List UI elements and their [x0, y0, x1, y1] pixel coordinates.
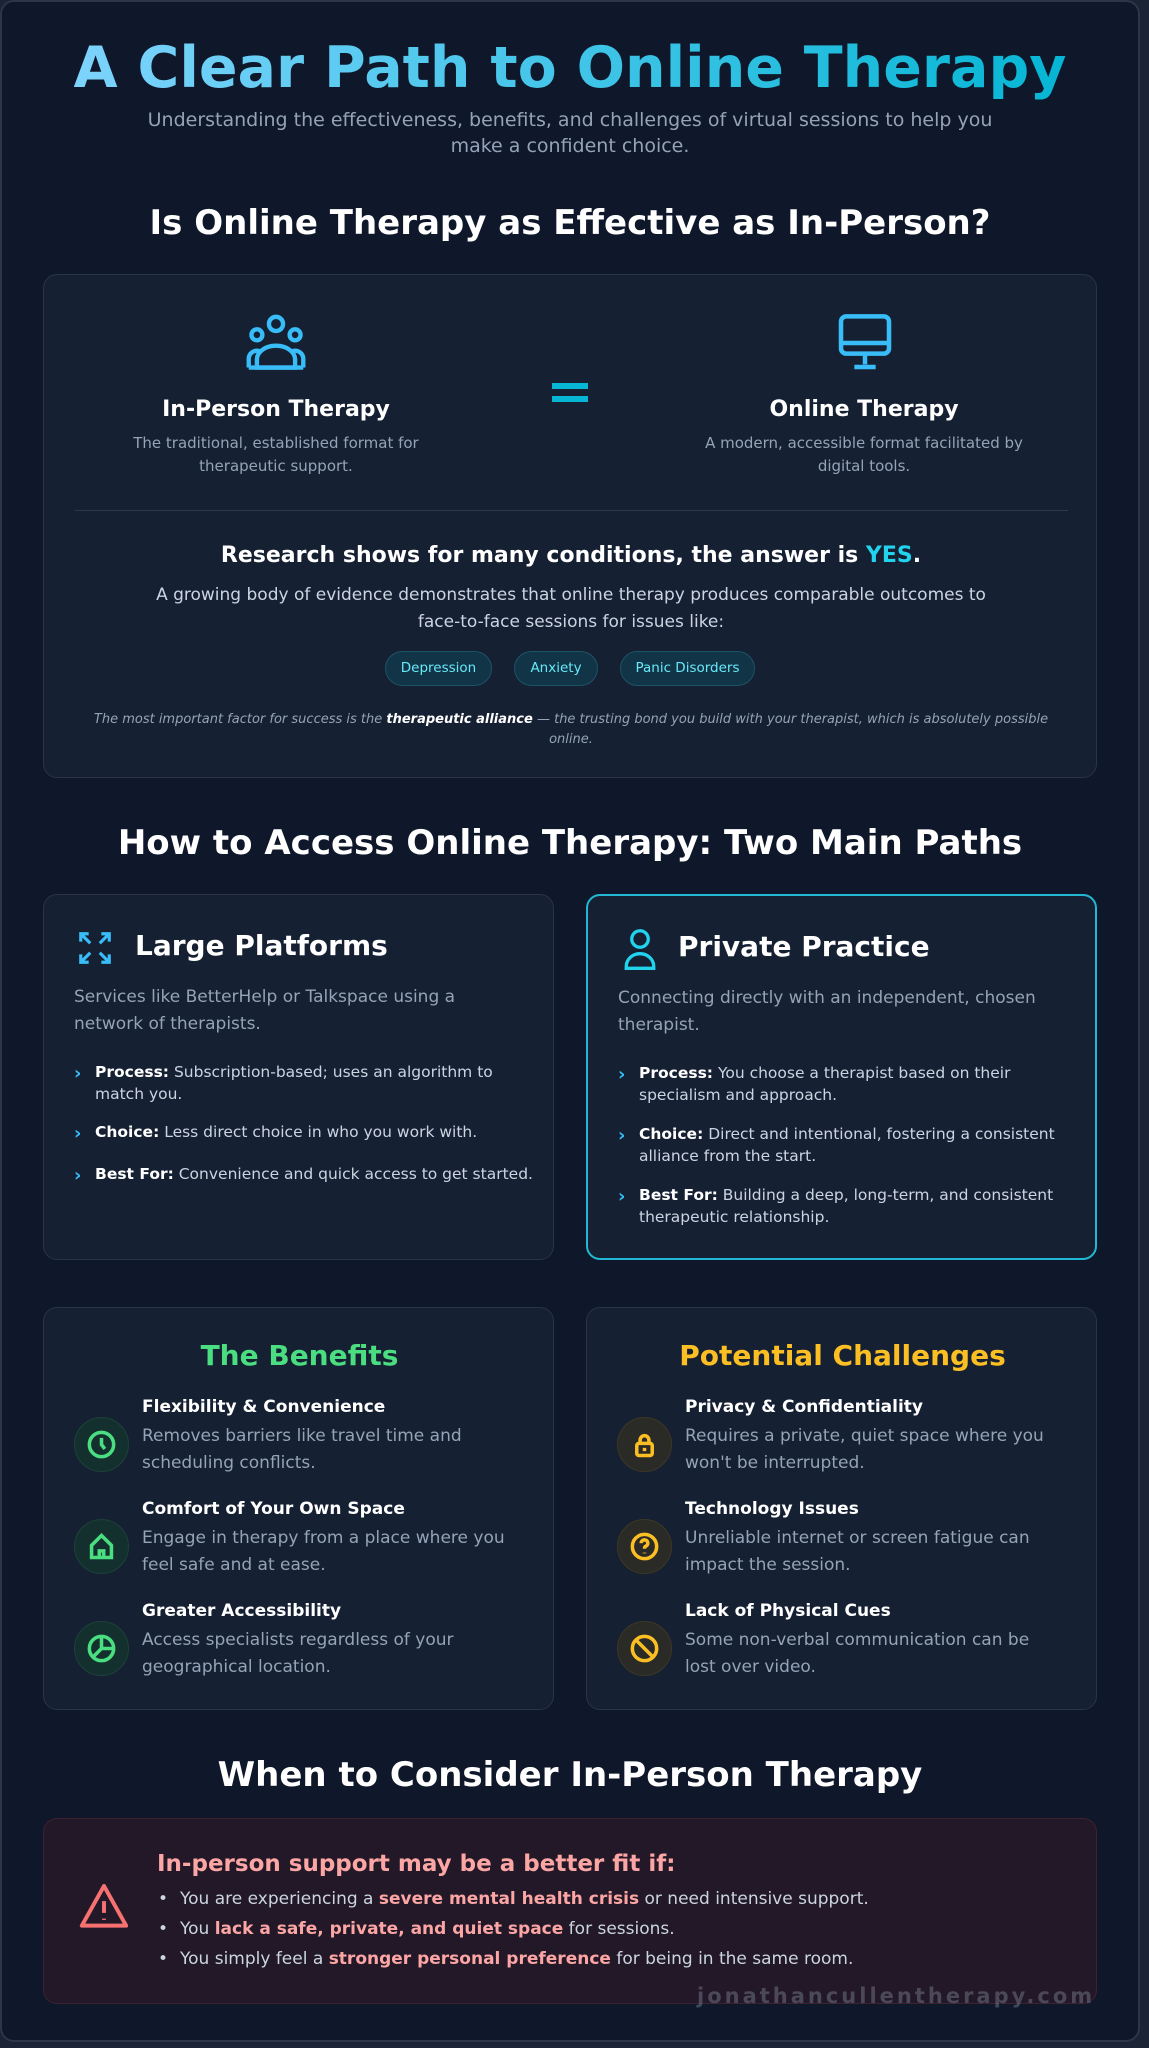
research statement: Research shows for many conditions, the answer is YES.: [221, 543, 921, 568]
pill: anxiety: Anxiety: [530, 660, 582, 676]
pill: panic: Panic Disorders: [635, 660, 740, 676]
benefit: accessibility: [74, 1601, 454, 1677]
bullets: Best For: Convenience and quick access to get started.: [95, 1165, 533, 1183]
challenge: technology: Unreliable internet or screen fatigue can impact the session.: [685, 1528, 1030, 1575]
warning heading: In-person support may be a better fit if:: [157, 1851, 675, 1877]
icon: people: [246, 314, 306, 370]
bullets: Choice: Less direct choice in who you work with.: [95, 1123, 477, 1141]
challenge: privacy: [617, 1397, 1044, 1473]
challenges title: Potential Challenges: [679, 1339, 1006, 1372]
icon: expand: [79, 932, 111, 964]
bullets: Process: Subscription-based; uses an algorithm to match you.: [95, 1063, 493, 1103]
panel: in-person warning: [43, 1818, 1097, 2004]
bullets: Choice: Direct and intentional, fostering a consistent alliance from the start.: [639, 1125, 1055, 1165]
benefit: flexibility: Removes barriers like travel time and scheduling conflicts.: [142, 1426, 462, 1473]
panel: challenges: Lack of Physical Cues: [685, 1601, 891, 1621]
in-person column: [133, 397, 419, 475]
icon: warning: [80, 1884, 128, 1928]
title: A Clear Path to Online Therapy: [74, 35, 1066, 101]
panel: benefits: Greater Accessibility: [142, 1601, 341, 1621]
in-person column: In-Person Therapy: [162, 397, 390, 422]
bullets: Best For: Building a deep, long-term, and consistent therapeutic relationship.: [639, 1186, 1053, 1226]
panel: challenges: Technology Issues: [685, 1499, 859, 1519]
icon: question: [617, 1519, 672, 1574]
online column: A modern, accessible format facilitated by digital tools.: [705, 434, 1023, 475]
panel: benefits: Flexibility & Convenience: [142, 1397, 385, 1417]
bullets: Process: You choose a therapist based on their specialism and approach.: [639, 1064, 1010, 1104]
watermark: jonathancullentherapy.com: [697, 1984, 1095, 2008]
panel: large platforms: [43, 894, 554, 1260]
panel: challenges: Privacy & Confidentiality: [685, 1397, 923, 1417]
heading: access: How to Access Online Therapy: Two Main Paths: [118, 823, 1022, 863]
in-person column: The traditional, established format for therapeutic support.: [133, 434, 419, 475]
warning bullets: [160, 1889, 869, 1969]
icon: ban: [617, 1621, 672, 1676]
heading: in-person: When to Consider In-Person Therapy: [218, 1755, 922, 1795]
warning bullets: You simply feel a stronger personal preference for being in the same room.: [180, 1949, 853, 1969]
online column: [705, 397, 1023, 475]
icon: globe: [74, 1621, 129, 1676]
icon: lock: [617, 1417, 672, 1472]
challenge: privacy: Requires a private, quiet space where you won't be interrupted.: [685, 1426, 1044, 1473]
card description: Connecting directly with an independent, chosen therapist.: [618, 988, 1036, 1035]
panel: challenges: [586, 1307, 1097, 1710]
panel: benefits: [43, 1307, 554, 1710]
pill: depression: Depression: [401, 660, 476, 676]
pill: panic: [620, 651, 755, 686]
warning bullets: You are experiencing a severe mental health crisis or need intensive support.: [180, 1889, 869, 1909]
benefit: comfort: [74, 1499, 505, 1575]
equals sign: [552, 383, 588, 402]
bullets: [620, 1064, 1055, 1226]
research paragraph: A growing body of evidence demonstrates that online therapy produces comparable outcomes to face-to-face sessions for issues like:: [156, 585, 986, 632]
card description: Services like BetterHelp or Talkspace using a network of therapists.: [74, 987, 455, 1034]
benefits title: The Benefits: [201, 1339, 398, 1372]
subtitle: Understanding the effectiveness, benefits, and challenges of virtual sessions to help you make a confident choice.: [148, 109, 992, 157]
benefit: flexibility: [74, 1397, 462, 1473]
panel: effectiveness: [43, 274, 1097, 778]
bullets: [76, 1063, 533, 1183]
icon: monitor: [838, 314, 892, 370]
card title: Large Platforms: [135, 929, 388, 962]
pill: anxiety: [514, 651, 598, 686]
warning bullets: You lack a safe, private, and quiet space for sessions.: [180, 1919, 675, 1939]
benefit: comfort: Engage in therapy from a place where you feel safe and at ease.: [142, 1528, 505, 1575]
online column: Online Therapy: [769, 397, 959, 422]
challenge: physical cues: [617, 1601, 1029, 1677]
panel: private practice: [586, 894, 1097, 1260]
pill: depression: [385, 651, 492, 686]
panel: benefits: Comfort of Your Own Space: [142, 1499, 405, 1519]
icon: clock: [74, 1417, 129, 1472]
heading: effectiveness: Is Online Therapy as Effective as In-Person?: [150, 203, 990, 243]
icon: person: [624, 929, 656, 970]
icon: house: [74, 1519, 129, 1574]
benefit: accessibility: Access specialists regardless of your geographical location.: [142, 1630, 454, 1677]
card title: Private Practice: [678, 930, 930, 963]
challenge: physical cues: Some non-verbal communication can be lost over video.: [685, 1630, 1029, 1677]
challenge: technology: [617, 1499, 1030, 1575]
note: The most important factor for success is the therapeutic alliance — the trusting bond you build with your therapist, which is absolutely possible online.: [94, 712, 1048, 747]
